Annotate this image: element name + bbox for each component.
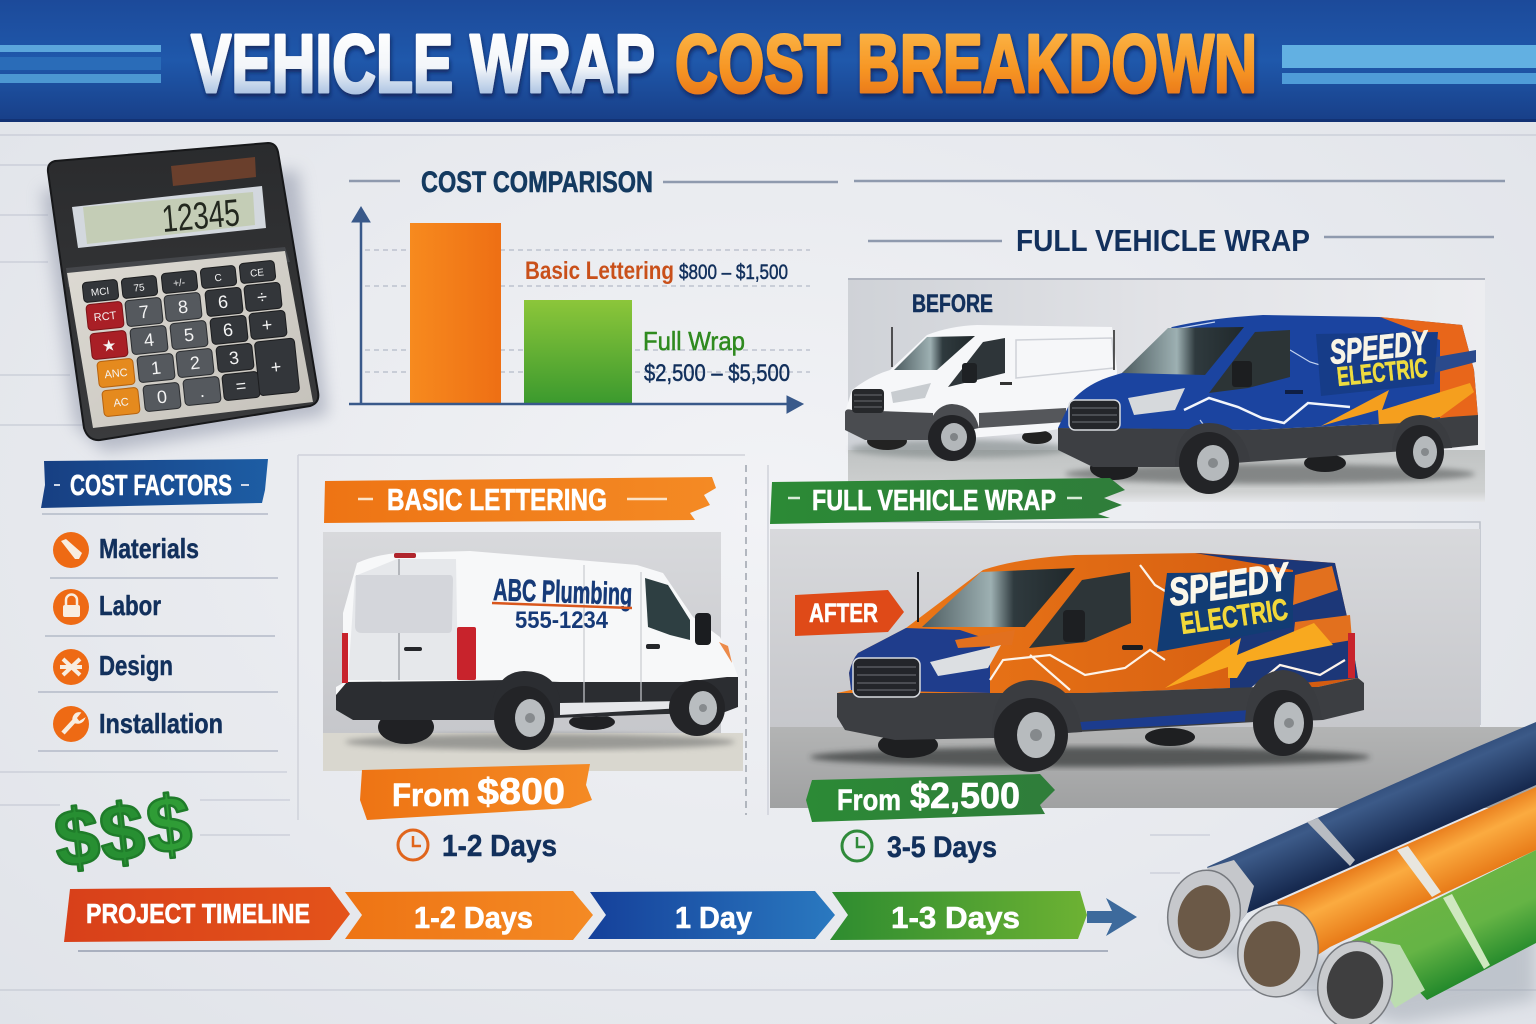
panel: cost factors bbox=[38, 459, 278, 751]
factor: installation: Installation bbox=[99, 708, 223, 739]
van body orange bbox=[837, 553, 1358, 693]
basic lettering banner: BASIC LETTERING bbox=[387, 482, 607, 517]
van: white before bbox=[845, 325, 1117, 461]
full vehicle wrap banner: FULL VEHICLE WRAP bbox=[812, 485, 1056, 517]
duration: 1-2 days bbox=[398, 828, 557, 863]
calculator keys: MCI bbox=[90, 286, 110, 299]
logo: speedy electric bbox=[1316, 324, 1438, 396]
factor: design: Design bbox=[99, 650, 173, 681]
project timeline bbox=[64, 887, 1137, 951]
timeline step: project timeline: PROJECT TIMELINE bbox=[86, 898, 310, 929]
duration: 3-5 days: 3-5 Days bbox=[887, 831, 997, 864]
calculator keys: 2 bbox=[189, 353, 201, 373]
icon: dollar signs: $ bbox=[95, 786, 149, 879]
van: orange wrapped bbox=[810, 553, 1370, 772]
blue hood bbox=[849, 628, 990, 693]
panel: full vehicle wrap after bbox=[770, 478, 1536, 864]
cost comparison heading: COST COMPARISON bbox=[421, 166, 653, 199]
calculator display: 12345 bbox=[160, 192, 241, 241]
orange rear graphic bbox=[1380, 317, 1478, 420]
calculator keys: RCT bbox=[93, 310, 117, 324]
calculator keys: 8 bbox=[177, 297, 189, 317]
icon: calculator bbox=[42, 143, 328, 452]
icon: dollar signs: $ bbox=[142, 778, 196, 871]
label: full wrap price bbox=[643, 326, 790, 387]
calculator keys: 3 bbox=[228, 348, 240, 368]
factor: materials bbox=[53, 532, 199, 568]
bar chart: cost comparison bbox=[349, 207, 810, 413]
icon: dollar signs: $ bbox=[50, 791, 104, 884]
timeline step: 1-3 days bbox=[830, 891, 1087, 940]
timeline step: 1-2 days bbox=[345, 891, 593, 940]
cost factors banner bbox=[41, 459, 268, 508]
panel: basic lettering bbox=[323, 477, 743, 863]
van: blue wrapped bbox=[1058, 315, 1478, 494]
calculator keys: + bbox=[261, 315, 273, 335]
price banner: from $800 bbox=[360, 764, 592, 820]
full vehicle wrap banner bbox=[770, 478, 1125, 524]
calculator keys bbox=[82, 260, 300, 417]
calculator keys: = bbox=[235, 376, 247, 396]
label: basic lettering price: Basic Lettering bbox=[525, 257, 674, 285]
timeline step: 1-3 days: 1-3 Days bbox=[891, 900, 1020, 935]
rolls of wrap vinyl bbox=[1161, 722, 1536, 1024]
van lettering: abc plumbing: ABC Plumbing bbox=[493, 572, 633, 612]
logo: speedy electric bbox=[1157, 555, 1293, 652]
logo: speedy electric: SPEEDY bbox=[1328, 324, 1432, 372]
calculator keys: ÷ bbox=[256, 287, 268, 307]
heading: full vehicle wrap: FULL VEHICLE WRAP bbox=[1016, 223, 1310, 258]
factor: materials: Materials bbox=[99, 533, 199, 564]
timeline step: project timeline bbox=[64, 887, 350, 942]
price banner: from $2,500: From bbox=[837, 784, 901, 817]
calculator keys: . bbox=[198, 381, 206, 401]
price banner: from $2,500 bbox=[806, 774, 1055, 822]
calculator keys: ANC bbox=[104, 367, 128, 381]
calculator keys: C bbox=[214, 273, 222, 284]
chart axes bbox=[349, 207, 803, 413]
roll: navy bbox=[1161, 722, 1536, 964]
cost factors banner: COST FACTORS bbox=[70, 470, 232, 502]
timeline arrow bbox=[1087, 898, 1137, 936]
yellow bolt bbox=[1165, 623, 1333, 688]
blue rear bbox=[1195, 553, 1358, 690]
roll: green bbox=[1311, 850, 1536, 1024]
heading: full vehicle wrap bbox=[868, 223, 1494, 258]
calculator keys: AC bbox=[113, 396, 129, 410]
calculator keys: 5 bbox=[183, 325, 195, 345]
label: basic lettering price bbox=[525, 257, 788, 285]
title text: VEHICLE WRAP bbox=[191, 17, 655, 110]
title banner bbox=[0, 0, 1536, 122]
calculator keys: 1 bbox=[150, 358, 162, 378]
label: basic lettering price: $800 – $1,500 bbox=[679, 261, 788, 284]
factor: labor bbox=[53, 589, 161, 625]
calculator keys: 75 bbox=[133, 282, 146, 295]
factor: installation bbox=[53, 706, 223, 742]
bar: full wrap bbox=[524, 300, 632, 403]
right header stripes bbox=[1282, 45, 1536, 84]
van: white with lettering bbox=[336, 551, 738, 750]
calculator keys: CE bbox=[250, 267, 265, 280]
bar: basic lettering bbox=[410, 223, 501, 403]
factor: design bbox=[53, 649, 173, 685]
roll: orange bbox=[1231, 787, 1536, 1003]
basic lettering banner bbox=[324, 477, 716, 523]
timeline step: 1 day: 1 Day bbox=[675, 900, 753, 935]
duration: 1-2 days: 1-2 Days bbox=[442, 828, 557, 863]
price banner: from $800: $800 bbox=[477, 771, 565, 812]
timeline step: 1 day bbox=[588, 891, 835, 939]
panel: before and after fleet bbox=[845, 279, 1485, 502]
yellow bolt bbox=[1321, 383, 1474, 426]
logo: speedy electric: SPEEDY bbox=[1166, 555, 1293, 615]
calculator keys: 7 bbox=[138, 302, 150, 322]
calculator keys: 0 bbox=[156, 387, 168, 407]
price banner: from $800: From bbox=[392, 777, 470, 813]
calculator keys: 6 bbox=[217, 292, 229, 312]
calculator keys: 6 bbox=[222, 320, 234, 340]
label: full wrap price: $2,500 – $5,500 bbox=[644, 360, 790, 387]
logo: speedy electric: ELECTRIC bbox=[1335, 353, 1429, 392]
logo: speedy electric: ELECTRIC bbox=[1178, 593, 1290, 641]
van lettering: abc plumbing: 555-1234 bbox=[515, 607, 609, 634]
price banner: from $2,500: $2,500 bbox=[910, 775, 1020, 816]
label: after: AFTER bbox=[809, 598, 878, 628]
calculator keys: +/- bbox=[173, 277, 186, 290]
calculator solar panel bbox=[171, 157, 256, 186]
calculator keys: 4 bbox=[143, 330, 155, 350]
label: full wrap price: Full Wrap bbox=[643, 326, 745, 356]
calculator keys: ★ bbox=[101, 337, 117, 356]
left header stripes bbox=[0, 45, 161, 83]
timeline step: 1-2 days: 1-2 Days bbox=[414, 900, 533, 935]
calculator keys: + bbox=[270, 357, 282, 377]
dividers bbox=[298, 455, 768, 820]
factor: labor: Labor bbox=[99, 590, 161, 621]
calculator display bbox=[72, 186, 266, 248]
title text: COST BREAKDOWN bbox=[675, 17, 1257, 110]
duration: 3-5 days bbox=[842, 831, 997, 864]
label: before: BEFORE bbox=[912, 290, 993, 318]
label: after bbox=[795, 590, 904, 636]
van lettering: abc plumbing bbox=[492, 572, 633, 634]
title text bbox=[191, 17, 1257, 110]
icon: dollar signs bbox=[50, 778, 196, 884]
